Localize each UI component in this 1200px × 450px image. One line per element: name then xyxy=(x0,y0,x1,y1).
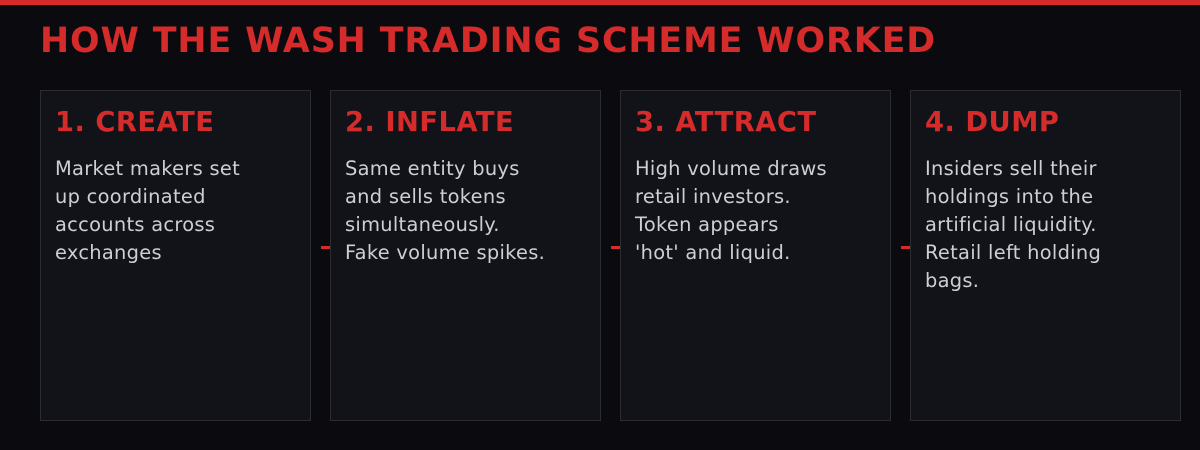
heading: create: 1. CREATE xyxy=(55,107,214,138)
heading: dump: 4. DUMP xyxy=(925,107,1059,138)
text: attract: retail investors. xyxy=(635,185,791,208)
text: create: Market makers set xyxy=(55,157,240,180)
arrow: 3 to 4 xyxy=(901,246,910,249)
text: dump: artificial liquidity. xyxy=(925,213,1097,236)
heading: attract: 3. ATTRACT xyxy=(635,107,817,138)
text: dump: Retail left holding xyxy=(925,241,1101,264)
text: attract xyxy=(634,157,827,264)
panel: dump xyxy=(910,90,1181,421)
arrow: 1 to 2 xyxy=(321,246,330,249)
text: attract: 'hot' and liquid. xyxy=(635,241,791,264)
text: inflate xyxy=(345,157,545,264)
text: inflate: Same entity buys xyxy=(345,157,520,180)
panel: create xyxy=(40,90,311,421)
heading: inflate: 2. INFLATE xyxy=(345,107,514,138)
text: create: exchanges xyxy=(55,241,162,264)
title: HOW THE WASH TRADING SCHEME WORKED xyxy=(40,21,936,61)
text: attract: High volume draws xyxy=(635,157,827,180)
text: dump: bags. xyxy=(925,269,979,292)
arrow: 2 to 3 xyxy=(611,246,620,249)
panel: inflate xyxy=(330,90,601,421)
text: create xyxy=(55,157,240,264)
text: attract: Token appears xyxy=(635,213,779,236)
text: inflate: and sells tokens xyxy=(345,185,506,208)
panel: attract xyxy=(620,90,891,421)
text: create: accounts across xyxy=(55,213,215,236)
text: dump: Insiders sell their xyxy=(925,157,1097,180)
text: inflate: simultaneously. xyxy=(345,213,500,236)
text: dump xyxy=(925,157,1101,292)
text: create: up coordinated xyxy=(55,185,206,208)
text: inflate: Fake volume spikes. xyxy=(345,241,545,264)
text: dump: holdings into the xyxy=(925,185,1093,208)
